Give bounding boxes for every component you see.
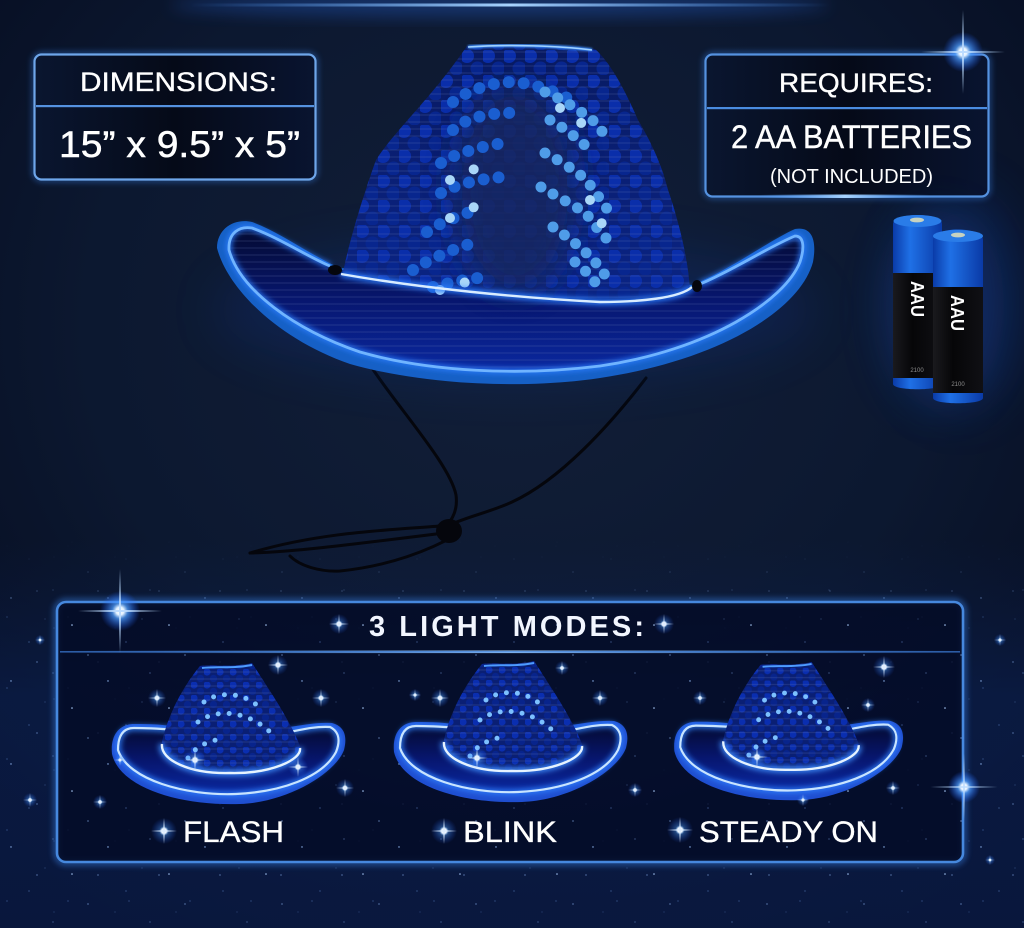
batteries bbox=[888, 215, 988, 403]
battery left: AAU bbox=[907, 281, 927, 317]
battery right: 2100 bbox=[951, 382, 965, 388]
hat centre shading bbox=[453, 85, 577, 295]
hat: blink mode bbox=[394, 661, 627, 849]
hat band light wire bbox=[341, 274, 692, 302]
hat: steady on mode bbox=[667, 662, 903, 849]
hat crown bbox=[342, 45, 690, 298]
not included note: (NOT INCLUDED) bbox=[770, 166, 933, 188]
heading: light modes: 3 LIGHT MODES: bbox=[369, 611, 644, 643]
label: flash: FLASH bbox=[183, 816, 284, 849]
hat brim bbox=[217, 221, 814, 384]
panel: dimensions bbox=[34, 54, 316, 180]
label: blink: BLINK bbox=[463, 816, 557, 849]
sequin highlights bbox=[413, 82, 610, 290]
dimensions value: 15” x 9.5” x 5” bbox=[59, 124, 300, 165]
hat: flash mode bbox=[112, 663, 345, 849]
cowboy hat chin strap bbox=[250, 368, 646, 571]
panel: light modes bbox=[56, 601, 964, 863]
band fasteners bbox=[328, 265, 702, 292]
cowboy hat bbox=[215, 45, 815, 384]
crown top light wire bbox=[468, 46, 592, 50]
panel: batteries required bbox=[705, 54, 989, 198]
battery left: 2100 bbox=[910, 368, 924, 374]
top glow line bbox=[190, 4, 830, 6]
battery right bbox=[933, 230, 983, 403]
heading: requires: REQUIRES: bbox=[779, 68, 933, 98]
batteries text: 2 AA BATTERIES bbox=[731, 119, 972, 155]
label: steady on: STEADY ON bbox=[699, 816, 878, 849]
battery right: AAU bbox=[947, 295, 967, 331]
hat glow bbox=[215, 240, 815, 380]
battery left bbox=[893, 215, 942, 389]
strap toggle bbox=[436, 519, 462, 543]
heading: dimensions: DIMENSIONS: bbox=[80, 67, 277, 97]
